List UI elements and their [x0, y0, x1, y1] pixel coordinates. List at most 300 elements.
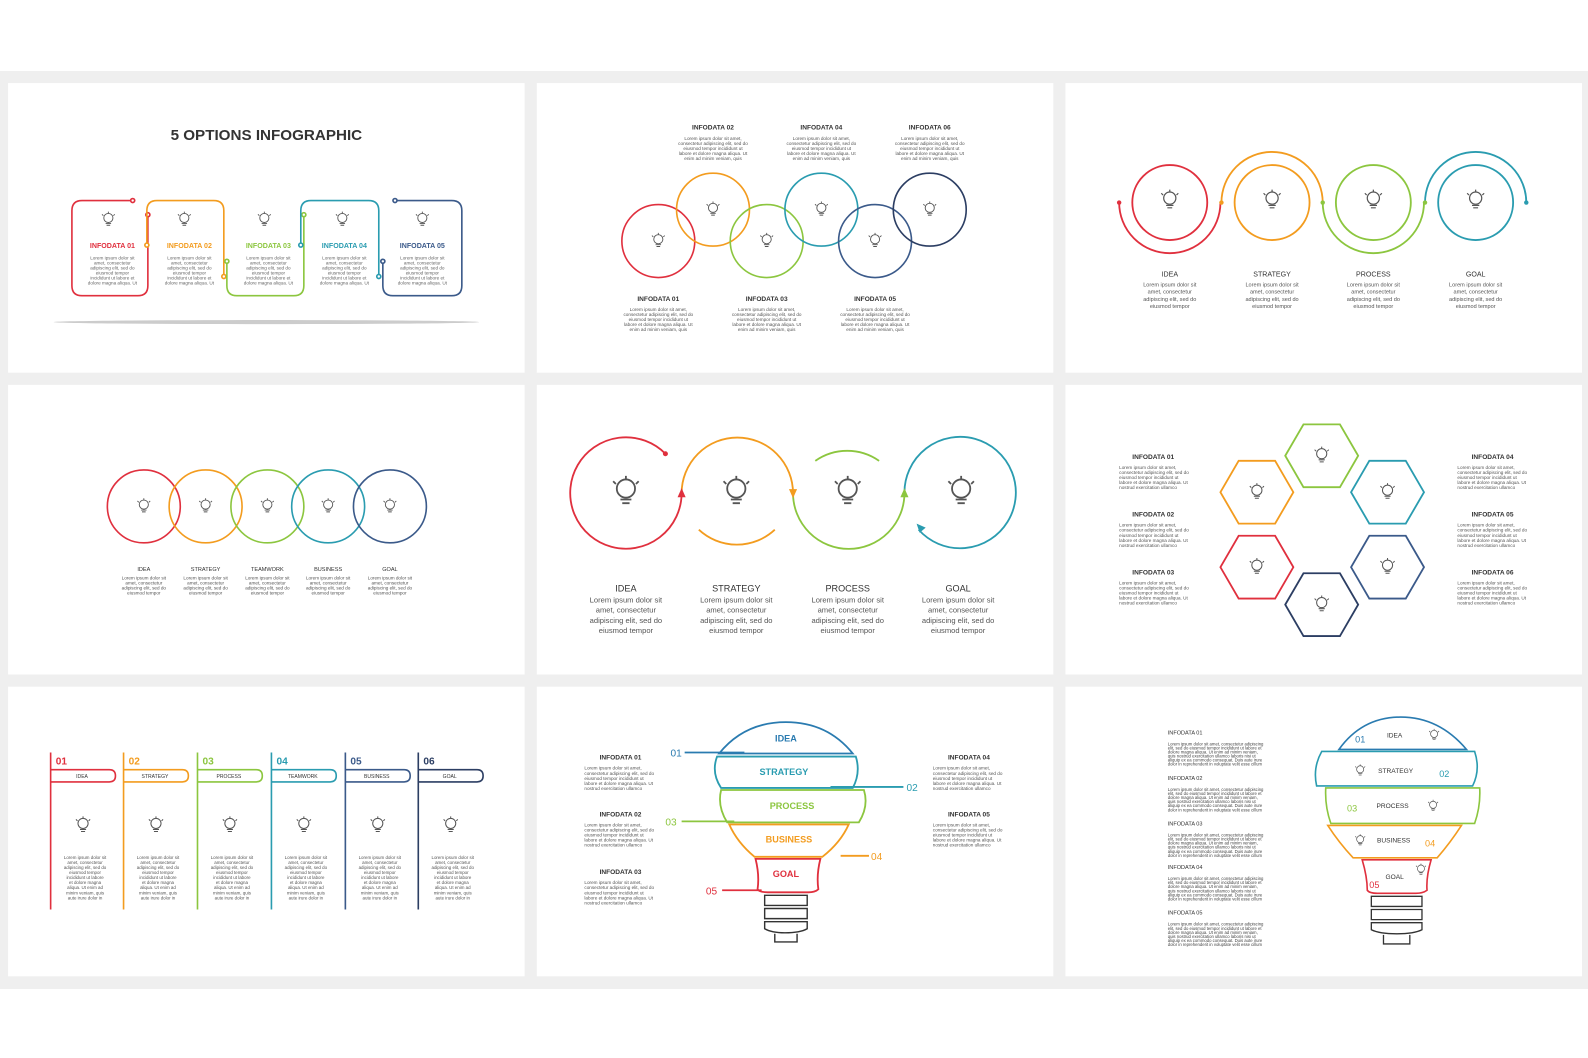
panel: 5 options infographic: incididunt ut labore et [246, 276, 291, 281]
panel: bulb with text column: elit, sed do eiusmod tempor incididunt ut labore et [1168, 745, 1262, 750]
panel: 6 columns: 06 [423, 757, 435, 768]
panel: 6 linked circles [537, 83, 1053, 373]
panel: bulb with side text: Lorem ipsum dolor sit amet, [584, 822, 642, 827]
panel: 6 columns: adipiscing elit, sed do [211, 865, 254, 870]
panel: bulb with text column: dolor in reprehenderit in voluptate velit esse cillum [1168, 807, 1262, 812]
panel: bulb with side text: INFODATA 02 [600, 811, 642, 818]
panel: 5 overlapping circles [8, 385, 525, 675]
panel: 6 linked circles: labore et dolore magna aliqua. Ut [679, 151, 748, 156]
panel: 6 linked circles: eiusmod tempor incididunt ut [792, 146, 852, 151]
panel: 6 columns: aute irure dolor in [435, 895, 471, 900]
panel: bulb with text column: STRATEGY [1378, 768, 1414, 775]
panel: hexagons: nostrud exercitation ullamco [1457, 485, 1516, 490]
panel: hexagons: Lorem ipsum dolor sit amet, [1457, 465, 1515, 470]
panel: 6 linked circles: Lorem ipsum dolor sit amet, [684, 136, 742, 141]
panel: 6 columns: aute irure dolor in [363, 895, 398, 900]
panel: 6 columns [8, 687, 525, 976]
panel: 5 options infographic: dolore magna aliqua. Ut [320, 281, 370, 286]
panel: bulb with text column: INFODATA 04 [1168, 865, 1202, 871]
panel: bulb with text column: aliquip ex ea commodo consequat. Duis aute irure [1168, 892, 1263, 897]
panel: 5 overlapping circles: Lorem ipsum dolor sit [245, 575, 290, 580]
panel: 4 circles with arcs: amet, consectetur [1351, 290, 1396, 296]
panel: 5 options infographic: Lorem ipsum dolor sit [322, 255, 367, 260]
panel: 5 options infographic: Lorem ipsum dolor sit [400, 255, 445, 260]
panel: bulb with text column: PROCESS [1377, 803, 1409, 810]
panel: bulb with side text: INFODATA 01 [600, 755, 642, 762]
panel: 4 circles with arcs: amet, consectetur [1454, 290, 1498, 296]
panel: 6 linked circles: INFODATA 01 [637, 296, 680, 303]
panel: bulb with side text: PROCESS [770, 801, 814, 811]
panel: bulb with text column: quis nostrud exercitation ullamco laboris nisi ut [1168, 754, 1256, 759]
panel: 6 linked circles: enim ad minim veniam, quis [630, 327, 688, 332]
panel: hexagons: INFODATA 05 [1472, 512, 1514, 519]
panel: bulb with text column: BUSINESS [1377, 838, 1411, 845]
panel: 6 columns: Lorem ipsum dolor sit [359, 855, 402, 860]
panel: 6 linked circles: eiusmod tempor incididunt ut [683, 146, 743, 151]
panel: 4 circles with arcs: amet, consectetur [1148, 290, 1192, 296]
title: 5 OPTIONS INFOGRAPHIC [171, 127, 362, 144]
panel: hexagons: consectetur adipiscing elit, sed do [1119, 528, 1189, 533]
panel: bulb with text column: dolore magna aliqua. Ut enim ad minim veniam, [1168, 795, 1258, 800]
panel: 6 columns: minim veniam, quis [66, 890, 105, 895]
panel: hexagons: nostrud exercitation ullamco [1457, 543, 1516, 548]
panel: 4 large cycle circles: PROCESS [825, 583, 870, 593]
panel: 6 columns: aute irure dolor in [215, 895, 250, 900]
panel: 6 columns: eiusmod tempor [69, 870, 101, 875]
panel: 5 options infographic: adipiscing elit, sed do [246, 265, 291, 270]
panel: 6 columns: incididunt ut labore [361, 875, 399, 880]
panel: 6 linked circles: Lorem ipsum dolor sit amet, [630, 307, 687, 312]
panel: hexagons: nostrud exercitation ullamco [1119, 543, 1177, 548]
panel: 5 overlapping circles: Lorem ipsum dolor sit [183, 575, 228, 580]
panel: 6 columns: Lorem ipsum dolor sit [211, 855, 254, 860]
panel: bulb with text column: aliquip ex ea commodo consequat. Duis aute irure [1168, 758, 1263, 763]
panel: 5 options infographic: adipiscing elit, sed do [167, 265, 212, 270]
panel: bulb with text column: INFODATA 05 [1168, 911, 1202, 917]
panel: bulb with text column: Lorem ipsum dolor sit amet, consectetur adipiscing [1168, 787, 1264, 792]
panel: 6 columns: amet, consectetur [140, 860, 176, 865]
panel: hexagons: consectetur adipiscing elit, sed do [1119, 470, 1189, 475]
panel: 6 columns: aute irure dolor in [68, 895, 103, 900]
panel: 6 columns: adipiscing elit, sed do [137, 865, 180, 870]
panel: 4 large cycle circles: eiusmod tempor [709, 626, 764, 635]
panel: 6 linked circles: enim ad minim veniam, quis [684, 156, 742, 161]
panel: bulb with side text: 02 [906, 783, 918, 794]
panel: bulb with text column: 05 [1369, 880, 1379, 890]
panel: 6 columns: incididunt ut labore [213, 875, 251, 880]
panel: 5 options infographic: incididunt ut labore et [322, 276, 367, 281]
panel: bulb with text column [1065, 687, 1582, 976]
panel: 5 overlapping circles: amet, consectetur [187, 580, 224, 585]
panel: bulb with text column: dolore magna aliqua. Ut enim ad minim veniam, [1168, 884, 1258, 889]
panel: 5 options infographic: amet, consectetur [250, 260, 287, 265]
panel: bulb with side text: Lorem ipsum dolor sit amet, [584, 766, 642, 771]
panel: 6 linked circles: enim ad minim veniam, quis [738, 327, 796, 332]
panel: bulb with side text: consectetur adipiscing elit, sed do [584, 885, 654, 890]
panel: hexagons: eiusmod tempor incididunt ut [1457, 533, 1517, 538]
panel: bulb with side text: BUSINESS [766, 835, 812, 845]
panel: 6 columns: 01 [56, 757, 67, 768]
panel: hexagons: eiusmod tempor incididunt ut [1119, 475, 1179, 480]
panel: 4 large cycle circles: eiusmod tempor [821, 626, 875, 635]
panel: 6 columns: IDEA [76, 774, 89, 780]
panel: hexagons: labore et dolore magna aliqua. Ut [1457, 538, 1527, 543]
panel: 6 columns: BUSINESS [364, 774, 390, 780]
panel: bulb with side text: 01 [670, 749, 682, 760]
panel: 5 overlapping circles: amet, consectetur [371, 580, 409, 585]
panel: 6 columns: amet, consectetur [214, 860, 250, 865]
panel: hexagons: INFODATA 04 [1472, 454, 1514, 461]
panel: bulb with side text: 05 [706, 886, 718, 897]
panel: 6 columns: incididunt ut labore [434, 875, 472, 880]
panel: bulb with text column: 02 [1439, 769, 1449, 779]
panel: hexagons: INFODATA 06 [1472, 569, 1514, 576]
panel: 6 columns: et dolore magna [364, 880, 396, 885]
panel: bulb with side text: labore et dolore magna aliqua. Ut [584, 838, 654, 843]
panel: 6 linked circles: eiusmod tempor incididunt ut [629, 317, 689, 322]
panel: 6 linked circles: INFODATA 06 [909, 125, 951, 132]
panel: hexagons: labore et dolore magna aliqua. Ut [1457, 596, 1527, 601]
panel: 4 large cycle circles: Lorem ipsum dolor sit [700, 596, 773, 605]
panel: 6 columns: TEAMWORK [288, 774, 318, 780]
panel: 4 circles with arcs: adipiscing elit, sed do [1347, 297, 1400, 303]
panel: 4 large cycle circles: IDEA [615, 583, 637, 593]
panel: bulb with side text: nostrud exercitation ullamco [584, 843, 643, 848]
panel: 6 columns: 02 [129, 757, 140, 768]
panel: 5 options infographic: INFODATA 03 [246, 242, 291, 250]
panel: 4 large cycle circles: eiusmod tempor [931, 626, 986, 635]
panel: 6 linked circles: INFODATA 02 [692, 125, 734, 132]
panel: 6 columns: eiusmod tempor [142, 870, 174, 875]
panel: 4 large cycle circles: GOAL [945, 583, 971, 593]
panel: 6 columns: adipiscing elit, sed do [432, 865, 474, 870]
panel: bulb with side text: Lorem ipsum dolor sit amet, [933, 766, 990, 771]
panel: 6 columns: Lorem ipsum dolor sit [432, 855, 475, 860]
panel: 5 overlapping circles: amet, consectetur [310, 580, 347, 585]
panel: bulb with text column: quis nostrud exercitation ullamco laboris nisi ut [1168, 888, 1256, 893]
panel: bulb with text column: dolor in reprehenderit in voluptate velit esse cillum [1168, 896, 1262, 901]
panel: 6 columns: STRATEGY [142, 774, 169, 780]
panel: bulb with text column: IDEA [1387, 732, 1403, 739]
panel: bulb with side text: STRATEGY [759, 767, 808, 777]
panel: 6 linked circles: labore et dolore magna aliqua. Ut [787, 151, 856, 156]
panel: 6 columns: aliqua. Ut enim ad [67, 885, 103, 890]
panel: 6 columns: minim veniam, quis [213, 890, 252, 895]
panel: 5 overlapping circles: adipiscing elit, sed do [183, 585, 228, 590]
panel: 4 circles with arcs: Lorem ipsum dolor sit [1347, 283, 1400, 289]
panel: 6 columns: 05 [350, 757, 362, 768]
panel: 5 options infographic: INFODATA 02 [167, 242, 212, 250]
panel: bulb with side text: eiusmod tempor incididunt ut [933, 833, 993, 838]
panel: 6 linked circles: Lorem ipsum dolor sit amet, [738, 307, 795, 312]
panel: bulb with text column: dolor in reprehenderit in voluptate velit esse cillum [1168, 853, 1262, 858]
panel: 4 circles with arcs: Lorem ipsum dolor sit [1449, 283, 1503, 289]
panel: 5 options infographic: eiusmod tempor [173, 270, 206, 275]
panel: 5 overlapping circles: eiusmod tempor [127, 591, 161, 596]
panel: bulb with side text: INFODATA 04 [948, 755, 990, 762]
panel: 5 options infographic: Lorem ipsum dolor sit [90, 255, 135, 260]
panel: bulb with side text: nostrud exercitation ullamco [584, 786, 643, 791]
panel: 4 circles with arcs: amet, consectetur [1250, 290, 1294, 296]
panel: bulb with side text: eiusmod tempor incididunt ut [933, 776, 993, 781]
panel: 6 columns: 04 [276, 757, 288, 768]
panel: bulb with text column: dolor in reprehenderit in voluptate velit esse cillum [1168, 762, 1262, 767]
panel: 4 large cycle circles: Lorem ipsum dolor sit [811, 596, 885, 605]
panel: bulb with text column: dolore magna aliqua. Ut enim ad minim veniam, [1168, 930, 1258, 935]
panel: 6 columns: adipiscing elit, sed do [359, 865, 402, 870]
panel: 5 overlapping circles: adipiscing elit, sed do [122, 585, 166, 590]
panel: 4 large cycle circles: amet, consectetur [596, 606, 657, 615]
panel: 4 large cycle circles [537, 385, 1053, 675]
panel: hexagons: consectetur adipiscing elit, sed do [1457, 470, 1527, 475]
panel: bulb with text column: elit, sed do eiusmod tempor incididunt ut labore et [1168, 926, 1262, 931]
panel: 6 linked circles: INFODATA 04 [800, 125, 843, 132]
panel: bulb with text column: elit, sed do eiusmod tempor incididunt ut labore et [1168, 791, 1262, 796]
panel: bulb with text column: aliquip ex ea commodo consequat. Duis aute irure [1168, 938, 1263, 943]
panel: 4 circles with arcs: STRATEGY [1253, 270, 1291, 278]
panel: 5 options infographic: INFODATA 04 [322, 242, 367, 250]
panel: 4 circles with arcs: eiusmod tempor [1456, 304, 1496, 310]
panel: 6 columns: Lorem ipsum dolor sit [64, 855, 107, 860]
panel: 5 overlapping circles: Lorem ipsum dolor sit [122, 575, 167, 580]
panel: 4 large cycle circles: amet, consectetur [928, 606, 989, 615]
panel: 5 options infographic: dolore magna aliqua. Ut [398, 281, 448, 286]
panel: 6 linked circles: labore et dolore magna aliqua. Ut [624, 322, 693, 327]
panel: 5 overlapping circles: eiusmod tempor [189, 591, 223, 596]
panel: bulb with side text: Lorem ipsum dolor sit amet, [933, 822, 990, 827]
panel: 5 overlapping circles: BUSINESS [314, 567, 342, 573]
panel: bulb with text column: Lorem ipsum dolor sit amet, consectetur adipiscing [1168, 741, 1264, 746]
panel: bulb with side text: INFODATA 03 [600, 869, 642, 876]
panel: bulb with side text: eiusmod tempor incididunt ut [584, 776, 644, 781]
panel: bulb with side text: labore et dolore magna aliqua. Ut [584, 895, 654, 900]
panel: 6 linked circles: INFODATA 03 [746, 296, 788, 303]
panel: bulb with text column: INFODATA 02 [1168, 776, 1202, 782]
panel: 5 options infographic: incididunt ut labore et [400, 276, 445, 281]
panel: bulb with side text: eiusmod tempor incididunt ut [584, 833, 644, 838]
panel: 5 overlapping circles: STRATEGY [191, 567, 221, 573]
panel: 6 columns: minim veniam, quis [287, 890, 326, 895]
panel: 6 columns: amet, consectetur [288, 860, 324, 865]
panel: 6 linked circles: eiusmod tempor incididunt ut [845, 317, 905, 322]
panel: bulb with side text: IDEA [775, 733, 797, 743]
panel: 6 linked circles: Lorem ipsum dolor sit amet, [846, 307, 904, 312]
panel: 5 options infographic: adipiscing elit, sed do [90, 265, 135, 270]
panel: 6 linked circles: consectetur adipiscing elit, sed do [895, 141, 965, 146]
panel: 6 linked circles: Lorem ipsum dolor sit amet, [901, 136, 958, 141]
panel: 6 columns: incididunt ut labore [287, 875, 325, 880]
panel: 6 columns: eiusmod tempor [290, 870, 322, 875]
panel: bulb with side text: Lorem ipsum dolor sit amet, [584, 880, 642, 885]
panel: 6 columns: eiusmod tempor [216, 870, 248, 875]
panel: 6 columns: incididunt ut labore [66, 875, 104, 880]
panel: 6 linked circles: consectetur adipiscing elit, sed do [623, 312, 694, 317]
panel: 6 columns: eiusmod tempor [364, 870, 396, 875]
panel: bulb with side text: nostrud exercitation ullamco [584, 900, 643, 905]
panel: bulb with side text [537, 687, 1053, 976]
panel: 6 linked circles: labore et dolore magna aliqua. Ut [732, 322, 802, 327]
panel: 4 large cycle circles: eiusmod tempor [599, 626, 654, 635]
panel: bulb with side text: 04 [871, 852, 883, 863]
panel: bulb with text column: dolore magna aliqua. Ut enim ad minim veniam, [1168, 750, 1258, 755]
panel: bulb with text column: elit, sed do eiusmod tempor incididunt ut labore et [1168, 837, 1262, 842]
panel: 5 overlapping circles: IDEA [137, 567, 151, 573]
panel: 6 linked circles: enim ad minim veniam, quis [846, 327, 904, 332]
panel: 4 large cycle circles: adipiscing elit, sed do [922, 616, 994, 625]
panel: bulb with side text: labore et dolore magna aliqua. Ut [933, 781, 1002, 786]
panel: 5 options infographic: adipiscing elit, sed do [322, 265, 367, 270]
panel: hexagons: Lorem ipsum dolor sit amet, [1119, 465, 1176, 470]
panel: 6 columns: et dolore magna [437, 880, 469, 885]
panel: 5 overlapping circles: amet, consectetur [249, 580, 286, 585]
panel: 6 columns: Lorem ipsum dolor sit [285, 855, 328, 860]
panel: hexagons: eiusmod tempor incididunt ut [1457, 475, 1517, 480]
panel: 6 linked circles: enim ad minim veniam, quis [793, 156, 851, 161]
panel: 4 large cycle circles: STRATEGY [712, 583, 761, 593]
panel: hexagons: labore et dolore magna aliqua. Ut [1119, 480, 1188, 485]
panel: 5 options infographic: amet, consectetur [94, 260, 131, 265]
panel: bulb with text column: GOAL [1385, 874, 1404, 881]
panel: hexagons: Lorem ipsum dolor sit amet, [1119, 523, 1176, 528]
panel: 5 overlapping circles: eiusmod tempor [312, 591, 345, 596]
panel: hexagons: eiusmod tempor incididunt ut [1119, 533, 1179, 538]
panel: 5 options infographic: dolore magna aliqua. Ut [88, 281, 138, 286]
panel: 4 circles with arcs: IDEA [1162, 270, 1178, 278]
panel: 5 options infographic: incididunt ut labore et [90, 276, 135, 281]
panel: bulb with side text: GOAL [773, 869, 800, 879]
panel: bulb with text column: 03 [1347, 803, 1357, 813]
panel: 6 columns: amet, consectetur [435, 860, 471, 865]
panel: 4 large cycle circles: amet, consectetur [706, 606, 767, 615]
panel: 6 columns: aliqua. Ut enim ad [288, 885, 324, 890]
panel: bulb with side text: 03 [665, 817, 677, 828]
panel: 5 options infographic: eiusmod tempor [328, 270, 361, 275]
panel: 4 circles with arcs: Lorem ipsum dolor sit [1143, 283, 1197, 289]
panel: 6 columns: minim veniam, quis [139, 890, 178, 895]
panel: 6 columns: Lorem ipsum dolor sit [137, 855, 180, 860]
panel: bulb with text column: INFODATA 03 [1168, 821, 1202, 827]
panel: 6 linked circles: INFODATA 05 [854, 296, 896, 303]
panel: 4 large cycle circles: Lorem ipsum dolor sit [922, 596, 995, 605]
panel: hexagons: consectetur adipiscing elit, sed do [1119, 585, 1189, 590]
panel: 5 options infographic [8, 83, 525, 373]
panel: bulb with side text: eiusmod tempor incididunt ut [584, 890, 644, 895]
panel: bulb with text column: 01 [1355, 734, 1365, 744]
panel: bulb with side text: nostrud exercitation ullamco [933, 786, 991, 791]
panel: 6 columns: 03 [203, 757, 214, 768]
panel: hexagons: consectetur adipiscing elit, sed do [1457, 528, 1527, 533]
panel: 6 linked circles: eiusmod tempor incididunt ut [737, 317, 797, 322]
panel: bulb with side text: consectetur adipiscing elit, sed do [584, 828, 654, 833]
panel: 6 columns: PROCESS [217, 774, 242, 780]
panel: bulb with text column: aliquip ex ea commodo consequat. Duis aute irure [1168, 849, 1263, 854]
panel: bulb with text column: INFODATA 01 [1168, 730, 1202, 736]
panel: 5 overlapping circles: eiusmod tempor [373, 591, 407, 596]
panel: hexagons: nostrud exercitation ullamco [1119, 601, 1177, 606]
panel: 5 overlapping circles: Lorem ipsum dolor sit [306, 575, 351, 580]
panel: bulb with text column: quis nostrud exercitation ullamco laboris nisi ut [1168, 934, 1256, 939]
panel: 5 options infographic: Lorem ipsum dolor sit [246, 255, 291, 260]
panel: 4 circles with arcs: GOAL [1466, 270, 1486, 278]
panel: bulb with side text: labore et dolore magna aliqua. Ut [584, 781, 654, 786]
panel: 6 columns: et dolore magna [216, 880, 248, 885]
panel: hexagons: nostrud exercitation ullamco [1119, 485, 1177, 490]
panel: 6 columns: amet, consectetur [362, 860, 398, 865]
panel: 6 columns: incididunt ut labore [139, 875, 177, 880]
panel: 4 large cycle circles: adipiscing elit, sed do [811, 616, 884, 625]
panel: hexagons: INFODATA 02 [1132, 512, 1175, 519]
panel: hexagons: Lorem ipsum dolor sit amet, [1119, 580, 1176, 585]
panel: bulb with side text: nostrud exercitation ullamco [933, 843, 991, 848]
panel: hexagons: labore et dolore magna aliqua. Ut [1457, 480, 1527, 485]
panel: bulb with text column: Lorem ipsum dolor sit amet, consectetur adipiscing [1168, 833, 1264, 838]
panel: bulb with text column: Lorem ipsum dolor sit amet, consectetur adipiscing [1168, 922, 1264, 927]
panel: 6 columns: aute irure dolor in [141, 895, 176, 900]
panel: 5 overlapping circles: amet, consectetur [125, 580, 163, 585]
panel: hexagons: eiusmod tempor incididunt ut [1457, 591, 1517, 596]
panel: 4 large cycle circles: Lorem ipsum dolor sit [590, 596, 663, 605]
panel: bulb with text column: quis nostrud exercitation ullamco laboris nisi ut [1168, 799, 1256, 804]
panel: 4 circles with arcs: eiusmod tempor [1252, 304, 1292, 310]
panel: 4 circles with arcs: PROCESS [1356, 270, 1391, 278]
panel: bulb with text column: dolore magna aliqua. Ut enim ad minim veniam, [1168, 841, 1258, 846]
panel: hexagons: Lorem ipsum dolor sit amet, [1457, 580, 1515, 585]
panel: hexagons: INFODATA 01 [1132, 454, 1175, 461]
panel: 6 columns: aliqua. Ut enim ad [362, 885, 398, 890]
panel: 6 columns: aute irure dolor in [289, 895, 324, 900]
panel: 6 linked circles: consectetur adipiscing elit, sed do [787, 141, 857, 146]
panel: hexagons: labore et dolore magna aliqua. Ut [1119, 538, 1188, 543]
panel: 4 large cycle circles: adipiscing elit, sed do [590, 616, 662, 625]
panel: 6 columns: adipiscing elit, sed do [285, 865, 328, 870]
panel: 6 linked circles: labore et dolore magna aliqua. Ut [895, 151, 965, 156]
panel: 4 circles with arcs: eiusmod tempor [1150, 304, 1190, 310]
panel: 6 columns: adipiscing elit, sed do [64, 865, 107, 870]
panel: 6 linked circles: enim ad minim veniam, quis [901, 156, 959, 161]
panel: hexagons: labore et dolore magna aliqua. Ut [1119, 596, 1188, 601]
panel: 5 options infographic: amet, consectetur [171, 260, 208, 265]
panel: 5 overlapping circles: adipiscing elit, sed do [368, 585, 413, 590]
panel: 5 options infographic: adipiscing elit, sed do [400, 265, 445, 270]
panel: hexagons: nostrud exercitation ullamco [1457, 601, 1516, 606]
panel: 5 options infographic: amet, consectetur [404, 260, 441, 265]
panel: bulb with text column: dolor in reprehenderit in voluptate velit esse cillum [1168, 942, 1262, 947]
panel: 6 columns: aliqua. Ut enim ad [214, 885, 250, 890]
panel: 6 columns: aliqua. Ut enim ad [140, 885, 176, 890]
panel: bulb with text column: elit, sed do eiusmod tempor incididunt ut labore et [1168, 880, 1262, 885]
panel: 5 options infographic: dolore magna aliqua. Ut [244, 281, 294, 286]
panel: bulb with text column: aliquip ex ea commodo consequat. Duis aute irure [1168, 803, 1263, 808]
panel: bulb with side text: labore et dolore magna aliqua. Ut [933, 838, 1002, 843]
panel: 5 options infographic: eiusmod tempor [406, 270, 439, 275]
panel: 4 large cycle circles: adipiscing elit, sed do [700, 616, 773, 625]
panel: 4 large cycle circles: amet, consectetur [818, 606, 878, 615]
panel: bulb with side text: consectetur adipiscing elit, sed do [584, 771, 654, 776]
panel: 6 columns: et dolore magna [69, 880, 102, 885]
panel: 6 linked circles: labore et dolore magna aliqua. Ut [841, 322, 910, 327]
panel: bulb with text column: quis nostrud exercitation ullamco laboris nisi ut [1168, 845, 1256, 850]
panel: 6 linked circles: consectetur adipiscing elit, sed do [678, 141, 748, 146]
panel: hexagons: consectetur adipiscing elit, sed do [1457, 585, 1527, 590]
panel: hexagons: INFODATA 03 [1132, 569, 1175, 576]
panel: 6 columns: eiusmod tempor [437, 870, 469, 875]
panel: 5 options infographic: INFODATA 05 [400, 242, 445, 250]
panel: bulb with text column: Lorem ipsum dolor sit amet, consectetur adipiscing [1168, 876, 1264, 881]
panel: 4 circles with arcs: adipiscing elit, sed do [1245, 297, 1299, 303]
panel: 5 overlapping circles: Lorem ipsum dolor sit [368, 575, 413, 580]
panel: 4 circles with arcs [1065, 83, 1582, 373]
panel: 5 options infographic: amet, consectetur [326, 260, 363, 265]
